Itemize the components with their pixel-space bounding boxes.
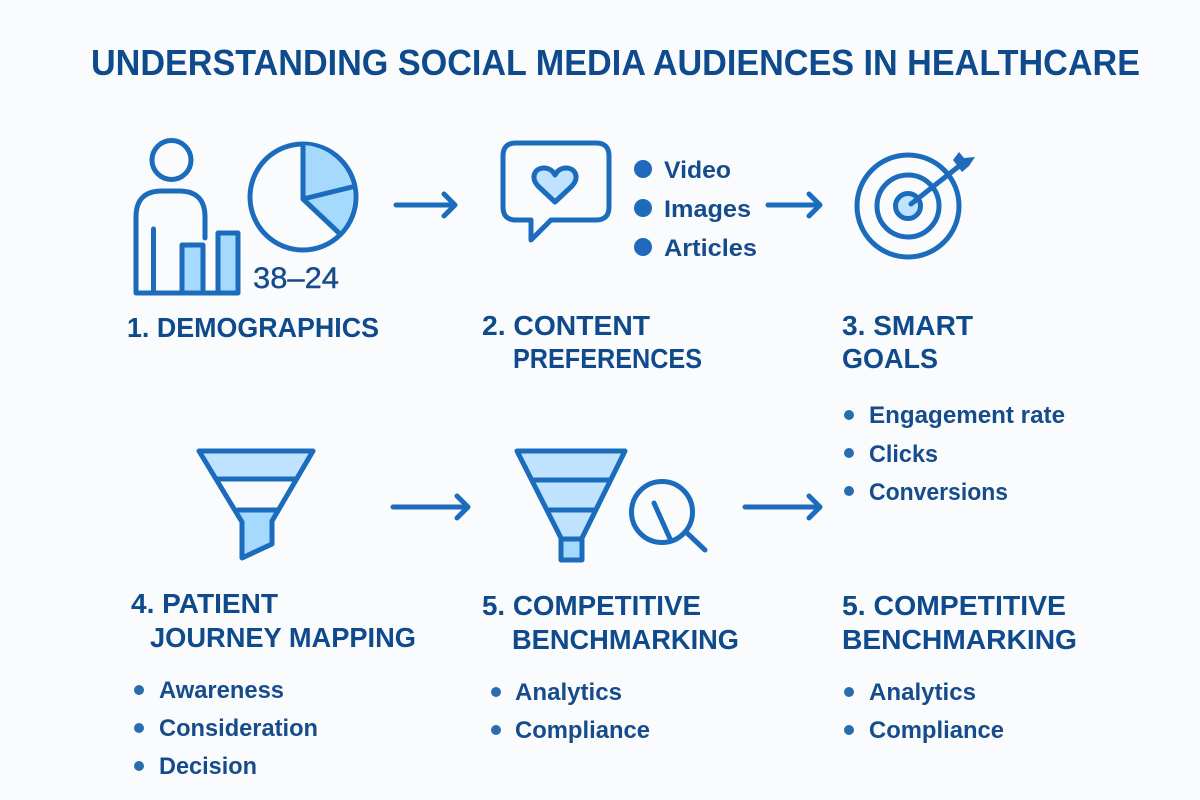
arrow: journey to benchmarking: [393, 496, 468, 518]
arrow: content to goals: [768, 194, 820, 216]
list: benchmarking items: [491, 679, 650, 744]
heading: competitive benchmarking: [482, 590, 739, 655]
icon: layered funnel: [517, 451, 625, 560]
icon: pie chart: [250, 144, 356, 250]
list: content types: [634, 157, 757, 262]
arrow: benchmarking to repeated benchmarking: [745, 496, 820, 518]
heading: content preferences: PREFERENCES: [513, 343, 702, 374]
icon: funnel: [199, 451, 313, 558]
list: benchmarking items: Compliance: [515, 717, 650, 744]
heading: patient journey mapping: [131, 588, 416, 653]
list: benchmarking items repeated: Compliance: [869, 717, 1004, 744]
panel: smart goals: [842, 152, 1065, 506]
heading: competitive benchmarking: 5. COMPETITIVE: [482, 590, 701, 621]
list: benchmarking items repeated: Analytics: [869, 679, 976, 706]
heading: content preferences: [482, 310, 702, 374]
icon: person with bar chart: [136, 140, 239, 293]
list: content types: Articles: [664, 235, 757, 262]
heading: competitive benchmarking repeated: 5. COMPETITIVE: [842, 590, 1066, 621]
list: goal metrics: Engagement rate: [869, 402, 1065, 429]
list: benchmarking items: Analytics: [515, 679, 622, 706]
arrow: demographics to content: [396, 194, 455, 216]
list: journey stages: [134, 677, 318, 780]
heading: smart goals: GOALS: [842, 343, 938, 374]
list: goal metrics: [844, 402, 1065, 506]
heading: demographics: 1. DEMOGRAPHICS: [127, 312, 379, 343]
panel: competitive benchmarking: [482, 451, 739, 744]
icon: speech bubble with heart: [503, 143, 609, 240]
list: content types: Images: [664, 196, 751, 223]
age range label: 38–24: [253, 262, 339, 295]
list: benchmarking items repeated: [844, 679, 1004, 744]
heading: content preferences: 2. CONTENT: [482, 310, 650, 341]
panel: content preferences: [482, 143, 757, 374]
title: UNDERSTANDING SOCIAL MEDIA AUDIENCES IN HEALTHCARE: [91, 42, 1140, 83]
icon: magnifying glass: [632, 482, 705, 550]
panel: patient journey mapping: [131, 451, 416, 780]
heading: competitive benchmarking repeated: BENCHMARKING: [842, 624, 1077, 655]
list: journey stages: Consideration: [159, 715, 318, 742]
list: goal metrics: Conversions: [869, 479, 1008, 506]
heading: patient journey mapping: JOURNEY MAPPING: [150, 622, 416, 653]
heading: smart goals: 3. SMART: [842, 310, 973, 341]
heading: smart goals: [842, 310, 973, 374]
panel: competitive benchmarking repeated: [842, 590, 1077, 744]
list: content types: Video: [664, 157, 731, 184]
heading: competitive benchmarking repeated: [842, 590, 1077, 655]
list: goal metrics: Clicks: [869, 441, 938, 468]
icon: target with arrow: [857, 152, 975, 257]
panel: demographics: [127, 140, 379, 343]
list: journey stages: Awareness: [159, 677, 284, 704]
heading: competitive benchmarking: BENCHMARKING: [512, 624, 739, 655]
list: journey stages: Decision: [159, 753, 257, 780]
heading: patient journey mapping: 4. PATIENT: [131, 588, 278, 619]
